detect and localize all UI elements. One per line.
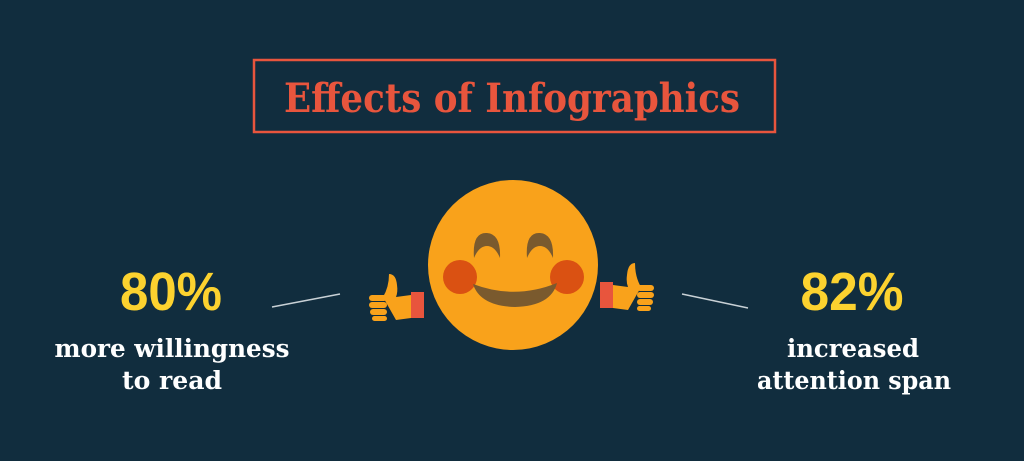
icon: thumbs up left <box>369 274 424 321</box>
icon: smiley face <box>428 180 598 350</box>
icon: thumbs up right <box>600 263 654 311</box>
stat: left 80%: 80% <box>120 262 222 322</box>
stat: right 82%: increased <box>787 334 919 363</box>
connector line right <box>682 294 748 308</box>
stat: left 80%: to read <box>122 366 222 395</box>
stat: right 82%: 82% <box>800 262 904 322</box>
stat: left 80% <box>54 262 290 395</box>
connector line left <box>272 294 340 307</box>
stat: left 80%: more willingness <box>54 334 290 363</box>
title: Effects of Infographics <box>284 75 740 122</box>
title <box>254 60 775 132</box>
stat: right 82% <box>757 262 951 395</box>
stat: right 82%: attention span <box>757 366 951 395</box>
